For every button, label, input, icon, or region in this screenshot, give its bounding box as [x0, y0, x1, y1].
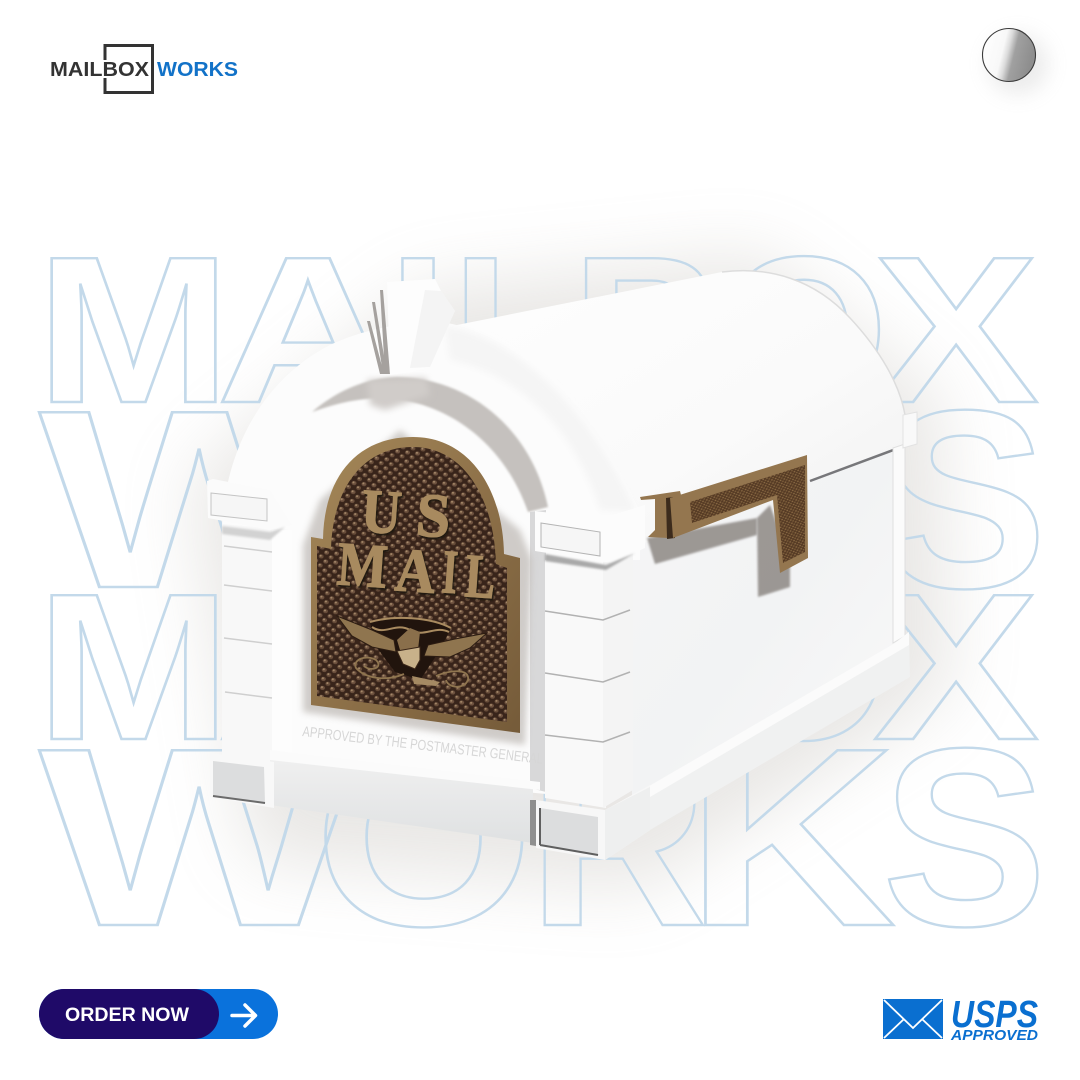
rear post — [893, 444, 905, 643]
flag bracket — [640, 491, 681, 538]
right plinth inset — [540, 808, 598, 855]
left column highlight — [272, 530, 292, 765]
bottom strip top lip — [632, 632, 909, 797]
envelope folds — [884, 1000, 942, 1038]
plaque lettering: MAIL — [335, 530, 498, 612]
logo square — [105, 46, 152, 92]
right capital underside shadow — [545, 553, 635, 570]
plaque lettering: US — [359, 477, 453, 551]
outline word: MAILBOX row 3: X — [873, 551, 1039, 784]
outline word: WORKS row 4: O — [314, 695, 534, 979]
right plinth — [536, 785, 650, 860]
text: APPROVED: APPROVED — [950, 1027, 1038, 1044]
plaque eagle emblem — [337, 616, 487, 687]
orb shadow — [988, 34, 1048, 94]
roof and side joint line — [810, 449, 896, 481]
outline word: MAILBOX row 1: B — [572, 214, 724, 447]
outline word: MAILBOX row 1: L — [452, 214, 578, 447]
left plinth inset — [213, 761, 265, 803]
icon: envelope — [883, 999, 943, 1039]
plaque lettering: US: S — [414, 481, 453, 551]
bronze flag — [640, 455, 808, 597]
centre base top lip — [270, 750, 540, 790]
eagle shield — [397, 647, 420, 669]
eagle banner — [370, 618, 451, 633]
left capital face — [207, 479, 292, 530]
outline word: MAILBOX row 3: I — [388, 551, 448, 784]
left block joints — [224, 546, 272, 698]
left capital — [207, 479, 292, 540]
plaque lettering: US: U — [359, 477, 404, 548]
button blue pill — [39, 989, 278, 1039]
button dark pill — [39, 989, 219, 1039]
outline word: MAILBOX row 3: B — [572, 551, 724, 784]
flag texture — [690, 465, 805, 563]
left capital inset — [211, 493, 267, 521]
eagle left wing — [337, 616, 396, 652]
outline word: WORKS row 2 — [39, 357, 1047, 641]
mailbox: roof — [452, 271, 905, 545]
icon: arrow — [232, 1005, 256, 1026]
flag pivot — [666, 497, 675, 539]
left capital shadow — [222, 526, 285, 540]
base gap shadow — [530, 800, 536, 846]
outline word: WORKS row 2: O — [314, 357, 534, 641]
usps approved badge — [883, 994, 1038, 1044]
soft shadow glow behind mailbox — [190, 255, 950, 890]
outline word: WORKS row 4: W — [39, 695, 359, 979]
envelope body — [883, 999, 943, 1039]
plaque lettering: MAIL: A — [393, 536, 438, 607]
right column side — [603, 552, 633, 808]
finial cast shadow — [367, 378, 430, 410]
eagle dark backing — [370, 618, 451, 680]
inner arch recess shadow — [312, 377, 548, 512]
metallic orb — [982, 28, 1048, 94]
eagle head — [397, 628, 420, 650]
logo text: MAILBOX: MAILBOX — [50, 59, 150, 81]
right column front — [545, 560, 606, 808]
outline word: WORKS row 4: R — [528, 695, 708, 979]
outline word: WORKS row 2: R — [528, 357, 708, 641]
orb body — [982, 28, 1036, 82]
bottom strip — [605, 632, 910, 860]
outline word: MAILBOX row 1 — [36, 214, 1039, 447]
embossed plaque caption: APPROVED BY THE POSTMASTER GENERAL — [302, 724, 544, 768]
eagle tail — [412, 676, 440, 686]
text: USPS: USPS — [951, 994, 1038, 1036]
base plinth — [210, 750, 650, 860]
plaque lettering: MAIL: L — [463, 542, 498, 612]
finial block — [387, 279, 455, 375]
rear cap top — [903, 412, 917, 448]
left plinth — [210, 753, 274, 808]
left column blocks — [222, 524, 292, 765]
outline word: MAILBOX row 1: O — [720, 214, 888, 447]
plaque lettering: MAIL: M — [335, 530, 390, 601]
outline word: WORKS row 2: K — [686, 357, 896, 641]
outline word: MAILBOX row 3: M — [36, 551, 231, 784]
bronze plaque — [311, 437, 520, 733]
right block joints — [545, 548, 631, 742]
plaque frame — [311, 437, 520, 733]
outline word: WORKS row 2: W — [39, 357, 359, 641]
mailbox product — [207, 271, 917, 860]
arch shading — [445, 326, 636, 512]
outline word: WORKS row 4: K — [686, 695, 896, 979]
outline word: MAILBOX row 1: M — [36, 214, 231, 447]
flag body — [670, 455, 808, 573]
right capital — [535, 505, 645, 570]
right column blocks — [545, 548, 633, 808]
outline word: MAILBOX row 3: A — [216, 551, 400, 784]
roof rim highlight — [722, 271, 905, 415]
outline word: WORKS row 4: S — [882, 695, 1047, 979]
outline word: WORKS row 4 — [39, 695, 1047, 979]
button label: ORDER NOW — [65, 1004, 190, 1026]
centre base — [270, 757, 533, 843]
outline word: MAILBOX row 1: I — [388, 214, 448, 447]
plaque shadow — [303, 430, 532, 745]
outline word: MAILBOX row 3: O — [720, 551, 888, 784]
left plinth inset shadow line — [213, 796, 265, 803]
right capital face — [535, 505, 645, 563]
recess side shadow — [530, 510, 546, 792]
flag cast shadow — [757, 505, 790, 597]
finial right facet — [410, 290, 455, 368]
right plinth side — [605, 787, 650, 860]
outline word: MAILBOX row 1: A — [216, 214, 400, 447]
right capital inset — [541, 523, 600, 556]
lower flag shadow — [647, 518, 757, 564]
finial fins — [367, 290, 390, 374]
right plinth inset shadow line — [540, 808, 598, 855]
order now button — [39, 989, 278, 1039]
finial — [367, 279, 455, 375]
logo — [50, 46, 238, 92]
outline word: MAILBOX row 1: X — [873, 214, 1039, 447]
outlined background wordmark — [36, 214, 1047, 979]
left column body — [222, 524, 290, 765]
plaque textured field — [317, 447, 507, 722]
mailbox: side panel — [632, 447, 897, 800]
plaque lettering: MAIL: I — [440, 538, 460, 607]
eagle scrolls — [355, 658, 468, 687]
outline word: MAILBOX row 3 — [36, 551, 1039, 784]
logo text: WORKS: WORKS — [157, 59, 238, 81]
eagle right wing — [424, 633, 487, 657]
outline word: MAILBOX row 3: L — [452, 551, 578, 784]
mailbox: front arch — [222, 322, 640, 800]
outline word: WORKS row 2: S — [882, 357, 1047, 641]
